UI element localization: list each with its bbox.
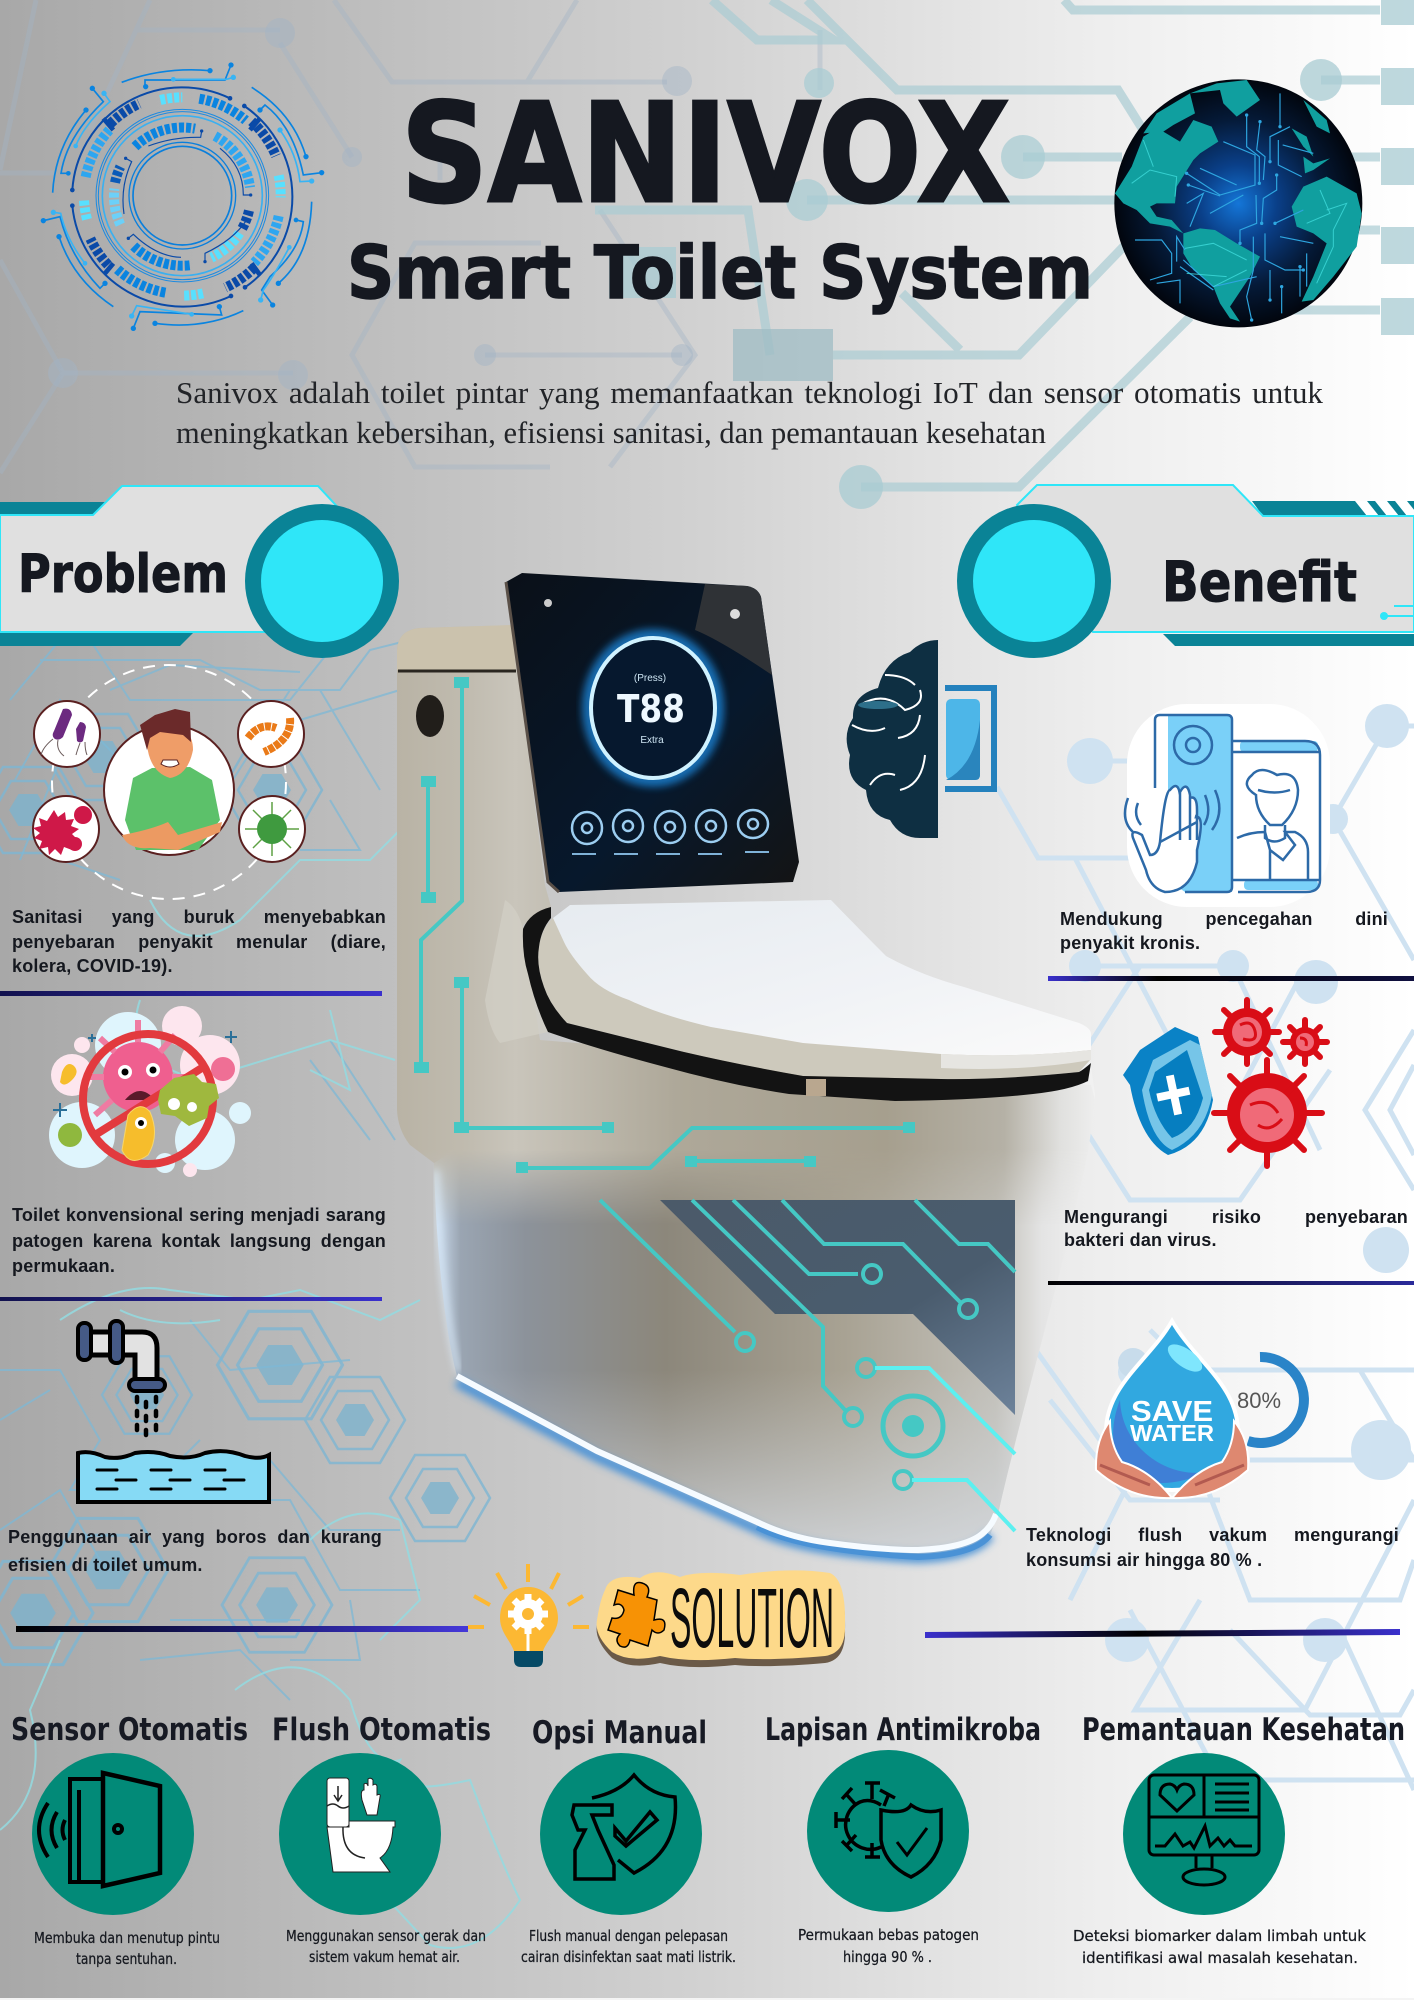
text: problem 2: [12, 1205, 386, 1276]
illustration: no germs: [49, 1006, 251, 1177]
feature: Pemantauan Kesehatan: identifikasi awal masalah kesehatan.: [1082, 1949, 1358, 1967]
title: [347, 75, 1093, 316]
text: problem 1: kolera, COVID-19).: [12, 956, 173, 976]
text: benefit 2: bakteri dan virus.: [1064, 1230, 1217, 1250]
icon: touchless sensor and doctor video: [1125, 704, 1330, 907]
text: benefit 2: Mengurangi risiko penyebaran: [1064, 1207, 1408, 1227]
feature: Sensor Otomatis: Sensor Otomatis: [11, 1712, 248, 1748]
main drawing layer: SOLUTION: [670, 1571, 834, 1665]
text: problem 1: penyebaran penyakit menular (diare,: [12, 932, 386, 952]
feature: Pemantauan Kesehatan: Deteksi biomarker dalam limbah untuk: [1073, 1927, 1366, 1945]
toilet touch screen: T88: [617, 687, 685, 731]
feature: Lapisan Antimikroba: [765, 1712, 1041, 1966]
text: benefit 2: [1064, 1207, 1408, 1250]
text: problem 2: patogen karena kontak langsung dengan: [12, 1230, 386, 1250]
world map outline: [0, 830, 520, 1948]
icon: save water: WATER: [1130, 1420, 1214, 1446]
illustration: sick man with germs: [33, 665, 305, 899]
icon: save water: [1096, 1321, 1304, 1498]
title: SANIVOX: [401, 75, 1010, 234]
panel: Benefit banner: Benefit: [1162, 550, 1357, 614]
toilet touch screen: Extra: [640, 735, 664, 746]
panel: Benefit banner: [965, 485, 1414, 650]
section divider: solution right: [925, 1629, 1400, 1638]
text: problem 2: permukaan.: [12, 1256, 115, 1276]
feature: Lapisan Antimikroba: Lapisan Antimikroba: [765, 1712, 1041, 1748]
feature: Flush Otomatis: [272, 1712, 491, 1966]
icon: save water: SAVE: [1131, 1396, 1213, 1428]
divider: [1048, 1281, 1414, 1285]
feature: Lapisan Antimikroba: hingga 90 % .: [843, 1948, 932, 1966]
sticker: SOLUTION: [597, 1570, 845, 1667]
section divider: solution left: [16, 1626, 468, 1632]
dark panel with circuit on toilet: [414, 677, 1015, 1531]
toilet LED strip: [436, 1170, 996, 1558]
text: benefit 3: konsumsi air hingga 80 % .: [1026, 1550, 1262, 1570]
text: problem 1: [12, 907, 386, 976]
icon: save water: 80%: [1237, 1388, 1281, 1413]
panel: Problem banner: [0, 486, 391, 650]
toilet lower bowl: [434, 1060, 1095, 1557]
feature: Lapisan Antimikroba: Permukaan bebas patogen: [798, 1926, 979, 1944]
text: problem 3: efisien di toilet umum.: [8, 1555, 203, 1575]
toilet lid and dark rim: [523, 900, 1091, 1101]
feature: Opsi Manual: [521, 1715, 736, 1966]
feature: Sensor Otomatis: tanpa sentuhan.: [76, 1950, 177, 1968]
text: benefit 1: [1060, 909, 1388, 953]
intro paragraph: [176, 375, 1323, 450]
icon: brain and mobile device: [847, 640, 994, 838]
feature: Opsi Manual: cairan disinfektan saat mati listrik.: [521, 1948, 736, 1966]
feature: Flush Otomatis: sistem vakum hemat air.: [309, 1948, 460, 1966]
divider: [0, 1297, 382, 1301]
panel: Problem banner: Problem: [18, 544, 228, 605]
text: benefit 3: Teknologi flush vakum mengurangi: [1026, 1525, 1399, 1545]
feature: Opsi Manual: Flush manual dengan pelepasan: [529, 1927, 728, 1945]
feature: Sensor Otomatis: [11, 1712, 248, 1968]
toilet touch screen: (Press): [634, 673, 666, 684]
divider: [1048, 976, 1414, 981]
intro paragraph: Sanivox adalah toilet pintar yang memanfaatkan teknologi IoT dan sensor otomatis untuk: [176, 375, 1323, 410]
intro paragraph: meningkatkan kebersihan, efisiensi sanitasi, dan pemantauan kesehatan: [176, 415, 1046, 450]
text: problem 3: [8, 1527, 382, 1575]
text: problem 1: Sanitasi yang buruk menyebabkan: [12, 907, 386, 927]
toilet touch screen: [506, 573, 799, 892]
right blue circuit hexes: [997, 726, 1414, 1790]
icon: leaking faucet and water: [78, 1321, 269, 1502]
text: benefit 3: [1026, 1525, 1399, 1570]
toilet upper body and tank: [397, 625, 1095, 1225]
feature: Flush Otomatis: Flush Otomatis: [272, 1712, 491, 1748]
left blue circuit hexes: [0, 714, 490, 1665]
feature: Flush Otomatis: Menggunakan sensor gerak dan: [286, 1927, 486, 1945]
divider: [0, 991, 382, 996]
icon: circuit ring: [41, 62, 324, 331]
icon: light bulb: [468, 1564, 589, 1667]
title: Smart Toilet System: [347, 231, 1093, 316]
icon: shield and red viruses: [1123, 1000, 1327, 1166]
text: problem 3: Penggunaan air yang boros dan kurang: [8, 1527, 382, 1547]
text: problem 2: Toilet konvensional sering menjadi sarang: [12, 1205, 386, 1225]
toilet: [397, 573, 1095, 1558]
feature: Sensor Otomatis: Membuka dan menutup pintu: [34, 1929, 220, 1947]
text: benefit 1: Mendukung pencegahan dini: [1060, 909, 1388, 929]
feature: Opsi Manual: Opsi Manual: [532, 1715, 707, 1751]
text: benefit 1: penyakit kronis.: [1060, 933, 1200, 953]
icon: digital globe: [1114, 79, 1362, 327]
feature: Pemantauan Kesehatan: [1073, 1712, 1405, 1967]
